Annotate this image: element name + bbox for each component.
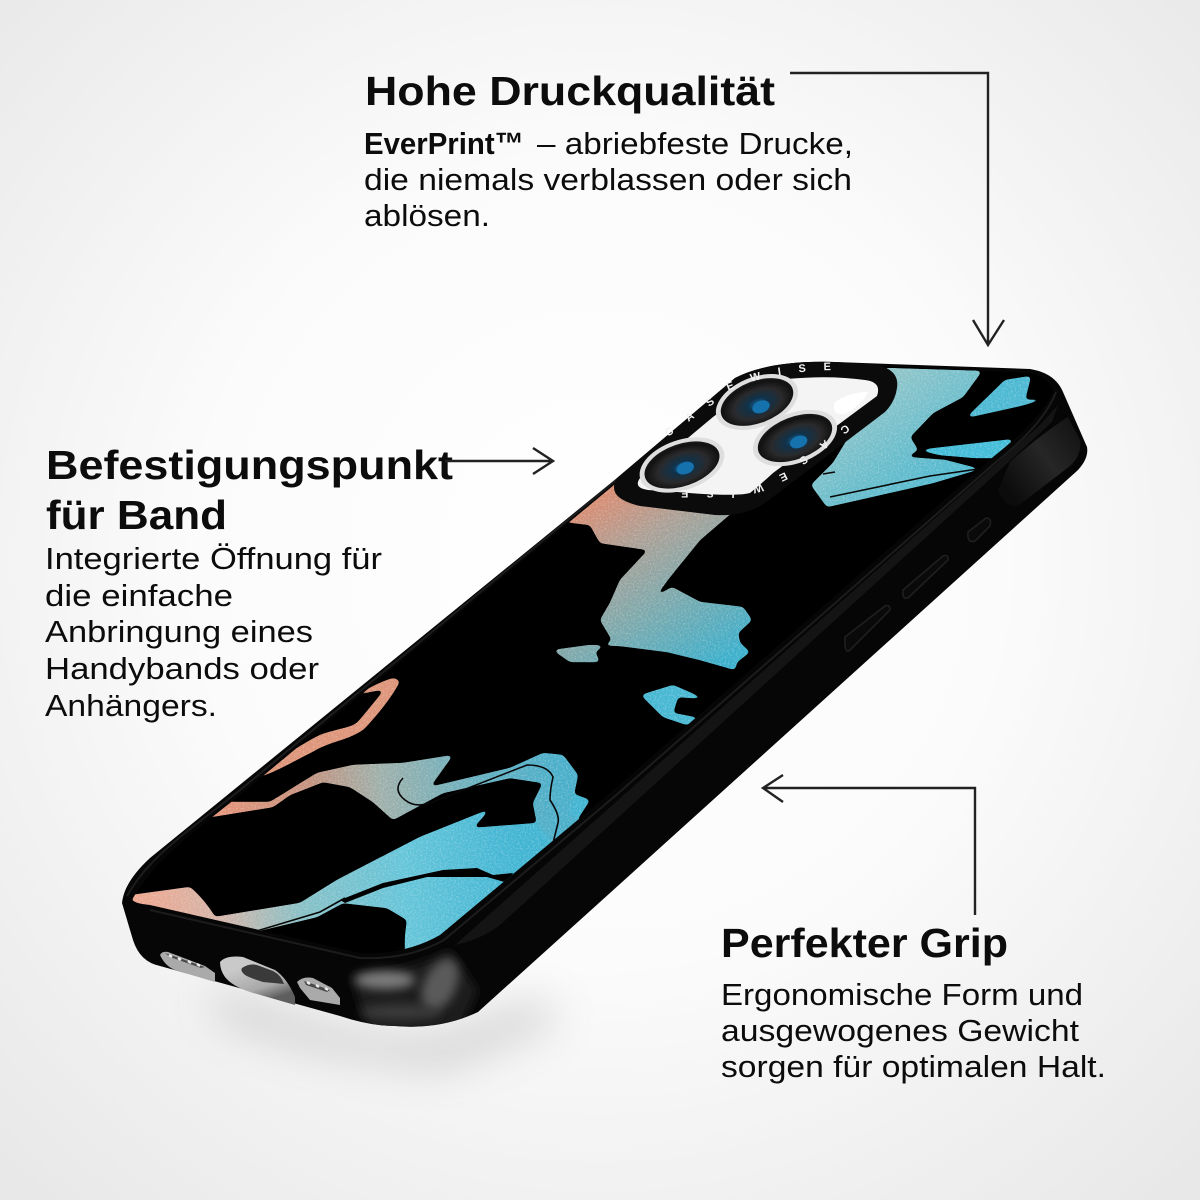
lower marble blob xyxy=(125,783,600,955)
left speaker port xyxy=(160,952,215,982)
arrow xyxy=(445,448,553,474)
heading xyxy=(46,442,453,538)
body text: Anhängers. xyxy=(45,688,217,723)
phone face xyxy=(133,364,1053,953)
top right side highlight xyxy=(998,417,1080,506)
body text: Handybands oder xyxy=(45,651,319,686)
glass highlights xyxy=(834,392,868,414)
body text: Ergonomische Form und xyxy=(721,977,1083,1012)
body text: Integrierte Öffnung für xyxy=(45,541,382,576)
upper volume button xyxy=(903,556,948,598)
lens right xyxy=(745,399,845,477)
body text: sorgen für optimalen Halt. xyxy=(721,1049,1106,1084)
callout: grip xyxy=(721,775,1106,1084)
side buttons xyxy=(845,518,990,651)
callout: print quality xyxy=(364,68,1004,345)
right speaker port xyxy=(297,978,340,1005)
marble artwork xyxy=(125,368,1050,955)
lens top xyxy=(708,363,806,441)
body text xyxy=(364,126,853,233)
action button xyxy=(968,518,990,542)
blue marble stripe xyxy=(918,439,1014,458)
body text: – abriebfeste Drucke, xyxy=(537,126,853,161)
phone shadow xyxy=(210,990,560,1068)
camera opening xyxy=(638,377,878,495)
thin marble lines xyxy=(250,469,978,933)
body text: ablösen. xyxy=(364,198,490,233)
middle marble shape xyxy=(553,470,752,670)
phone case xyxy=(122,362,1088,1027)
heading: für Band xyxy=(46,492,227,538)
body text xyxy=(45,541,382,723)
top corner marble shape xyxy=(970,376,1036,416)
bottom gloss corner xyxy=(352,950,478,1030)
charging port xyxy=(220,957,295,1005)
body text: ausgewogenes Gewicht xyxy=(721,1013,1079,1048)
body text: Anbringung eines xyxy=(45,614,313,649)
copper sliver xyxy=(263,678,399,776)
ring brand top: CASEWISE xyxy=(666,362,831,436)
arrow xyxy=(763,775,975,915)
arrow xyxy=(790,73,1004,345)
case body xyxy=(122,362,1087,1027)
lower volume button xyxy=(845,606,890,651)
body text xyxy=(721,977,1106,1084)
black marble veins xyxy=(340,868,513,903)
top right marble shape xyxy=(811,368,982,507)
lens left xyxy=(632,427,732,503)
body text: EverPrint™ xyxy=(364,126,524,161)
callout: strap attachment xyxy=(45,442,553,723)
camera ring xyxy=(614,362,898,516)
face rim xyxy=(127,392,1056,958)
body text: die niemals verblassen oder sich xyxy=(364,162,852,197)
side edge band xyxy=(455,405,1058,945)
lower small marble shape xyxy=(641,685,705,725)
ring brand bottom: CASEWISE xyxy=(682,426,849,498)
heading: Perfekter Grip xyxy=(721,920,1008,966)
heading: Befestigungspunkt xyxy=(46,442,453,488)
heading: Hohe Druckqualität xyxy=(365,68,775,114)
upper marble blob xyxy=(205,753,580,843)
body text: die einfache xyxy=(45,578,233,613)
